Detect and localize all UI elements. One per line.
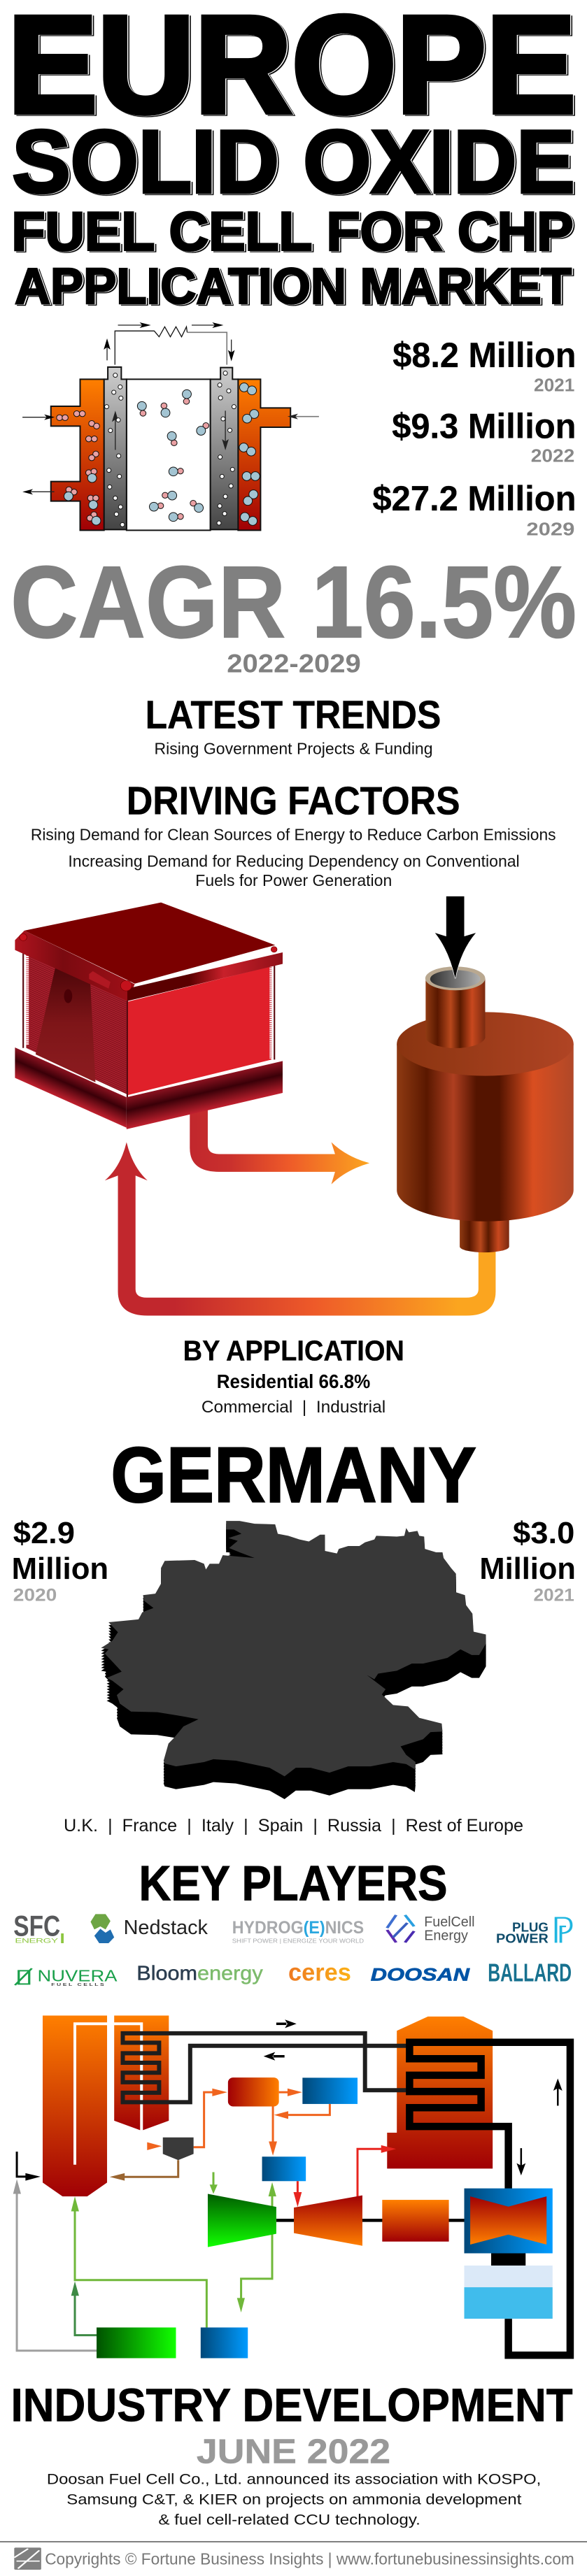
base right	[127, 1061, 283, 1129]
right electrode	[211, 368, 238, 529]
red flow lines	[297, 2149, 383, 2196]
orange arrowheads	[147, 2089, 302, 2156]
logo: Plug Power	[496, 1918, 572, 1946]
stack comb edge right	[269, 966, 271, 1059]
brown line and arrow	[110, 2160, 178, 2181]
fuel cell stack and reformer loop illustration	[15, 896, 574, 1315]
industry development	[11, 2379, 573, 2528]
combustor	[262, 2156, 306, 2181]
heading: by application: BY APPLICATION	[183, 1335, 404, 1367]
logo: Ceres: ceres	[288, 1959, 351, 1986]
hopper	[163, 2138, 194, 2160]
market size figures	[10, 336, 577, 659]
electrons	[105, 371, 236, 527]
neck rim	[425, 966, 485, 990]
coal feed box	[97, 2328, 176, 2358]
by application	[183, 1335, 404, 1416]
footer logo	[14, 2547, 41, 2570]
logo: Plug Power: POWER	[496, 1931, 549, 1946]
lid underside left	[15, 931, 135, 1001]
arrow: reformer to stack	[105, 1143, 495, 1315]
blue tank	[302, 2077, 358, 2104]
stack side plate	[36, 964, 95, 1082]
lower stub	[460, 1216, 509, 1252]
map extrusion	[101, 1524, 486, 1799]
anode chamber	[51, 379, 104, 530]
trend text: Rising Government Projects & Funding	[154, 740, 433, 758]
connector	[491, 2253, 525, 2266]
bolts	[20, 933, 277, 991]
logo: Nuvera	[15, 1966, 118, 1987]
neck opening	[430, 970, 481, 988]
latch	[89, 971, 111, 989]
plate hole	[64, 989, 72, 1003]
external circuit	[115, 327, 227, 365]
boiler	[387, 2017, 493, 2168]
black inlet arrow	[435, 896, 476, 978]
shaft	[276, 2219, 472, 2222]
map of Germany	[101, 1521, 486, 1799]
residential share: Residential 66.8%	[217, 1371, 370, 1392]
arrow: stack to reformer	[190, 1109, 369, 1185]
turbine	[294, 2196, 362, 2246]
logo: Nuvera: NUVERA	[38, 1966, 118, 1985]
CHP plant process diagram	[13, 2015, 570, 2358]
steam turbine rotor	[470, 2196, 546, 2245]
tie rods	[23, 952, 274, 1097]
green arrowheads	[71, 2182, 276, 2312]
title line: SOLID OXIDE: SOLID OXIDE	[13, 112, 575, 211]
lid top	[24, 903, 275, 984]
Germany panel	[12, 1431, 576, 1836]
logo: Bloom Energy: Bloomenergy	[136, 1962, 263, 1984]
2020 unit: Million	[12, 1552, 108, 1585]
logo: SFC Energy	[13, 1910, 64, 1945]
map surface	[101, 1521, 486, 1776]
footer rule	[0, 2541, 587, 2542]
condenser top	[464, 2266, 553, 2287]
electrolyte	[127, 379, 211, 530]
fuel cell diagram	[22, 322, 319, 530]
title	[8, 0, 576, 315]
heater	[228, 2077, 279, 2106]
left electrode	[104, 367, 127, 529]
logo: Nuvera: FUEL CELLS	[51, 1983, 104, 1987]
logo: FuelCell Energy: FuelCell	[424, 1914, 474, 1929]
black inlet and arrow	[17, 2152, 41, 2181]
trends and drivers text	[31, 649, 556, 889]
condenser water	[464, 2287, 553, 2319]
lid edge right	[127, 952, 283, 1001]
furnace	[43, 2015, 107, 2196]
value 2021	[479, 1515, 576, 1605]
dark green line and arrow	[71, 2281, 97, 2335]
flow arrows	[22, 322, 319, 494]
compressor	[208, 2194, 276, 2247]
stack comb edge left	[26, 954, 29, 1045]
date: JUNE 2022	[197, 2431, 390, 2470]
logo: Nedstack: Nedstack	[124, 1917, 208, 1939]
cathode chamber	[238, 379, 290, 530]
main cylinder body	[397, 1044, 574, 1222]
main cylinder top	[397, 1012, 574, 1076]
logo: Doosan: DOOSAN	[371, 1965, 470, 1984]
red arrowheads	[294, 2145, 396, 2207]
flow arrows	[264, 2019, 563, 2175]
logo: Nedstack	[90, 1914, 208, 1943]
grey line and arrow	[13, 2179, 97, 2351]
logo: Hydrogenics	[232, 1918, 364, 1945]
driver text 3: Fuels for Power Generation	[195, 873, 392, 889]
reformer vessel	[397, 896, 574, 1252]
stack side stripes	[26, 954, 127, 1094]
water loop and boiler coil	[409, 2042, 570, 2355]
2020 amount: $2.9	[13, 1515, 75, 1550]
key players	[13, 1856, 572, 1987]
logo: SFC Energy: ENERGY	[15, 1937, 59, 1945]
2021 year: 2021	[533, 1585, 574, 1605]
fuel cell stack	[15, 903, 283, 1129]
white flue path	[75, 2024, 141, 2165]
hydrogen molecules	[57, 399, 209, 521]
title line: APPLICATION MARKET: APPLICATION MARKET	[15, 259, 572, 315]
stack front face	[128, 966, 271, 1095]
base left	[15, 1047, 127, 1128]
footer	[0, 2541, 587, 2570]
upper neck	[425, 978, 485, 1048]
value 2020	[12, 1515, 108, 1605]
logo: FuelCell Energy: Energy	[424, 1927, 468, 1943]
title line: FUEL CELL FOR CHP: FUEL CELL FOR CHP	[11, 200, 573, 262]
logo: Hydrogenics: HYDROG(E)NICS	[232, 1918, 364, 1938]
orange flow lines	[194, 2092, 330, 2147]
logo: Plug Power: PLUG	[512, 1920, 549, 1935]
development text 3: & fuel cell-related CCU technology.	[158, 2512, 420, 2528]
steam coil	[123, 2033, 408, 2102]
logo: FuelCell Energy	[387, 1914, 474, 1943]
generator	[382, 2200, 449, 2242]
air feed box	[201, 2328, 248, 2358]
forecast period: 2022-2029	[227, 649, 361, 678]
other segments: Commercial | Industrial	[201, 1397, 386, 1416]
oxygen molecules	[64, 383, 260, 525]
2020 year: 2020	[13, 1585, 57, 1605]
steam turbine casing	[464, 2189, 553, 2253]
convective pass	[114, 2015, 169, 2131]
logo: Hydrogenics: SHIFT POWER | ENERGIZE YOUR WORLD	[232, 1938, 364, 1945]
green flow lines	[75, 2172, 272, 2328]
logo: SFC Energy: SFC	[13, 1910, 60, 1942]
